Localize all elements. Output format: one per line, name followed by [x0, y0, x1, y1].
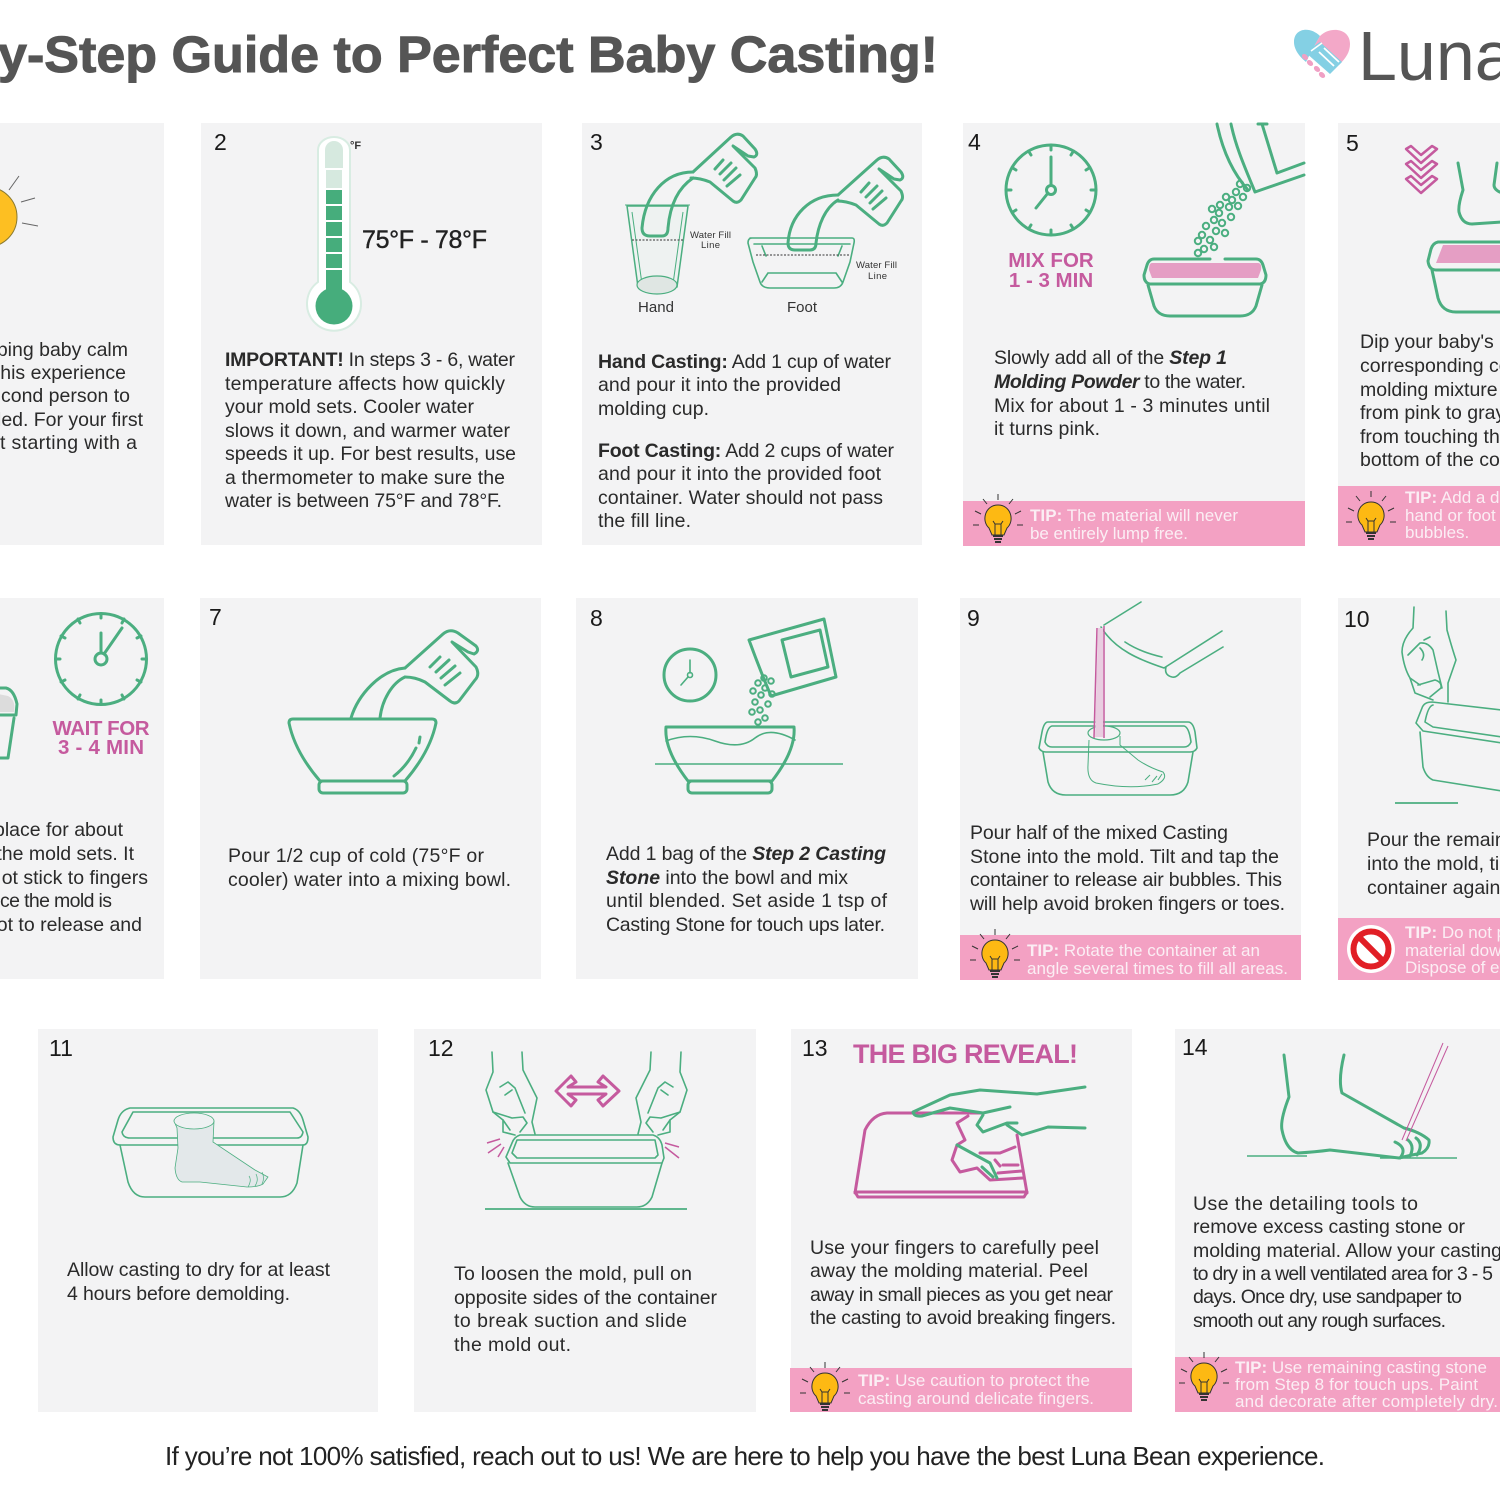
cup and container labels [638, 230, 897, 316]
icon: pulling container sides [485, 1052, 687, 1209]
step 14 text: days. Once dry, use sandpaper to [1193, 1286, 1462, 1308]
step 7 text: Pour 1/2 cup of cold (75°F or [228, 845, 484, 867]
step 8 text: until blended. Set aside 1 tsp of [606, 890, 888, 912]
step 1 text: his experience [0, 362, 126, 384]
step 3 text: Hand Casting: Add 1 cup of water [598, 351, 892, 373]
step 6 text [0, 819, 148, 936]
tip text: angle several times to fill all areas. [1027, 959, 1288, 978]
panel: step 2 [201, 123, 542, 545]
tip text: TIP: Use caution to protect the [858, 1371, 1090, 1390]
icon: pouring into mold [1039, 602, 1223, 795]
panel: step 3 [582, 123, 922, 545]
step 3 text: and pour it into the provided [598, 374, 841, 396]
title: y-Step Guide to Perfect Baby Casting! [0, 26, 938, 83]
step 2 text: IMPORTANT! In steps 3 - 6, water [225, 349, 516, 371]
tip text: TIP: Rotate the container at an [1027, 941, 1260, 960]
step 14 text: Use the detailing tools to [1193, 1193, 1418, 1215]
icon: lightbulb [973, 494, 1023, 542]
step 8 text: Stone into the bowl and mix [606, 867, 848, 889]
tip text [858, 1371, 1094, 1408]
step number 11: 11 [49, 1035, 73, 1061]
step 12 text: to break suction and slide [454, 1310, 687, 1332]
callout: wait time: WAIT FOR [52, 717, 150, 740]
icon: lightbulb [1179, 1352, 1229, 1400]
icon: thermometer: °F [350, 140, 361, 152]
step 8 text [606, 843, 888, 936]
step 11 text [67, 1259, 331, 1305]
step 1 text: led. For your first [0, 409, 144, 431]
panel: step 4 [963, 123, 1305, 546]
heading: the big reveal: THE BIG REVEAL! [853, 1039, 1078, 1069]
tip bar [963, 494, 1305, 546]
icon: clock [664, 649, 716, 701]
panel: step 14 [1175, 1029, 1500, 1412]
icon: lightbulb [1346, 491, 1396, 539]
step 9 text [969, 822, 1285, 915]
tip text [1405, 923, 1500, 977]
step 5 text: molding mixture [1360, 379, 1498, 401]
step 11 text: Allow casting to dry for at least [67, 1259, 331, 1281]
step 13 text: Use your fingers to carefully peel [810, 1237, 1099, 1259]
step 14 text: remove excess casting stone or [1193, 1216, 1466, 1238]
step 2 text: temperature affects how quickly [225, 373, 505, 395]
step 1 text [0, 339, 144, 454]
icon: no symbol [1347, 925, 1395, 973]
step 9 text: will help avoid broken fingers or toes. [969, 893, 1285, 915]
cup and container labels: Line [701, 240, 720, 251]
cup and container labels: Water Fill [690, 230, 731, 241]
step 1 text: ping baby calm [0, 339, 128, 361]
step 13 text: away the molding material. Peel [810, 1260, 1088, 1282]
step 3 text [598, 351, 894, 532]
step 12 text: the mold out. [454, 1334, 571, 1356]
icon: foot over container [1428, 163, 1500, 312]
step 2 text: your mold sets. Cooler water [225, 396, 474, 418]
step 12 text: To loosen the mold, pull on [454, 1263, 692, 1285]
panel: step 12 [414, 1029, 756, 1412]
step 3 text: the fill line. [598, 510, 691, 532]
step number 5: 5 [1346, 130, 1359, 156]
step number 7: 7 [209, 604, 222, 630]
step number 3: 3 [590, 129, 603, 155]
tip text: casting around delicate fingers. [858, 1389, 1094, 1408]
tip text [1405, 488, 1500, 542]
icon: sun [0, 176, 38, 247]
step 4 text [994, 347, 1270, 440]
step 12 text: opposite sides of the container [454, 1287, 718, 1309]
step 14 text: smooth out any rough surfaces. [1193, 1310, 1446, 1332]
step 4 text: Slowly add all of the Step 1 [994, 347, 1227, 369]
step 2 text: a thermometer to make sure the [225, 467, 505, 489]
icon: clock 1-3 min [1006, 145, 1096, 235]
callout: mix time: 1 - 3 MIN [1009, 269, 1093, 292]
step 9 text: Stone into the mold. Tilt and tap the [970, 846, 1279, 868]
step 4 text: Mix for about 1 - 3 minutes until [994, 395, 1270, 417]
tip bar [790, 1362, 1132, 1412]
step 6 text: ce the mold is [0, 890, 112, 912]
panel: step 10 [1338, 598, 1500, 980]
tip bar [1338, 918, 1500, 980]
icon: bag over bowl [655, 619, 843, 793]
tip bar [1338, 486, 1500, 546]
step 3 text: molding cup. [598, 398, 709, 420]
step 14 text [1193, 1193, 1500, 1332]
step 2 text [224, 349, 516, 512]
step 5 text [1360, 331, 1500, 471]
panel: step 7 [200, 598, 541, 979]
panel: step 13 [790, 1029, 1132, 1412]
step 10 text [1367, 829, 1500, 899]
step number 10: 10 [1344, 606, 1370, 632]
icon: lightbulb [800, 1362, 850, 1410]
logo: Luna Bean [1294, 17, 1500, 95]
step 6 text: ot stick to fingers [2, 867, 148, 889]
step 8 text: Casting Stone for touch ups later. [606, 914, 885, 936]
panel: step 9 [960, 598, 1301, 980]
tip text: hand or foot [1405, 506, 1496, 525]
footer message: If you’re not 100% satisfied, reach out to us! We are here to help you have the best Luna Bean experience. [165, 1441, 1325, 1471]
step 1 text: cond person to [1, 385, 130, 407]
step 4 text: Molding Powder to the water. [994, 371, 1246, 393]
step number 12: 12 [428, 1035, 454, 1061]
icon: container edge [0, 688, 17, 758]
step 10 text: container again [1367, 877, 1500, 899]
panel: step 6 [0, 598, 164, 979]
callout: wait time: 3 - 4 MIN [58, 736, 144, 759]
tip text [1235, 1358, 1498, 1411]
tip text: TIP: The material will never [1030, 506, 1238, 525]
step 6 text: ot to release and [0, 914, 142, 936]
cup and container labels: Line [868, 271, 887, 282]
step 3 text: Foot Casting: Add 2 cups of water [598, 440, 894, 462]
icon: drying casting in container [113, 1108, 308, 1197]
step 4 text: it turns pink. [994, 418, 1100, 440]
step 1 text: t starting with a [0, 432, 137, 454]
icon: lightbulb [970, 929, 1020, 977]
step number 4: 4 [968, 129, 981, 155]
step number 14: 14 [1182, 1034, 1208, 1060]
step 3 text: container. Water should not pass [598, 487, 883, 509]
step number 9: 9 [967, 605, 980, 631]
step 12 text [454, 1263, 718, 1356]
callout: wait time [52, 717, 150, 759]
tip text: from Step 8 for touch ups. Paint [1235, 1375, 1478, 1394]
step 6 text: the mold sets. It [0, 843, 135, 865]
callout: mix time [1008, 249, 1094, 292]
panel: step 11 [38, 1029, 378, 1412]
icon: pouring into foot container [748, 157, 903, 288]
step 13 text: the casting to avoid breaking fingers. [810, 1307, 1116, 1329]
step number 13: 13 [802, 1035, 828, 1061]
step number 8: 8 [590, 605, 603, 631]
tip text: bubbles. [1405, 523, 1469, 542]
icon: peeling mold [855, 1087, 1085, 1197]
step 2 text: slows it down, and warmer water [225, 420, 510, 442]
cup and container labels: Foot [787, 299, 818, 316]
icon: thermometer [307, 137, 361, 331]
callout: mix time: MIX FOR [1008, 249, 1094, 272]
icon: chevrons down [1406, 146, 1437, 193]
icon: double arrow [556, 1076, 619, 1106]
step 3 text: and pour it into the provided foot [598, 463, 882, 485]
step 14 text: to dry in a well ventilated area for 3 - 5 [1193, 1263, 1493, 1285]
icon: clock 3-4 min [56, 614, 146, 704]
step 2 text: speeds it up. For best results, use [225, 443, 516, 465]
icon: detailing foot [1247, 1043, 1457, 1158]
tip bar [960, 929, 1301, 980]
step 9 text: Pour half of the mixed Casting [970, 822, 1228, 844]
cup and container labels: Hand [638, 299, 674, 316]
step 14 text: molding material. Allow your casting [1193, 1240, 1500, 1262]
step 11 text: 4 hours before demolding. [67, 1283, 290, 1305]
icon: water into mixing bowl [289, 631, 478, 793]
tip text: be entirely lump free. [1030, 524, 1188, 543]
tip text: TIP: Use remaining casting stone [1235, 1358, 1487, 1377]
step 7 text [228, 845, 511, 891]
step 9 text: container to release air bubbles. This [970, 869, 1282, 891]
icon: pouring into cup [625, 134, 757, 294]
step 8 text: Add 1 bag of the Step 2 Casting [606, 843, 886, 865]
cup and container labels: Water Fill [856, 260, 897, 271]
temperature range: 75°F - 78°F [362, 226, 487, 254]
icon: powder into container [1144, 124, 1304, 316]
tip text: and decorate after completely dry. [1235, 1392, 1498, 1411]
panel: step 8 [576, 598, 918, 979]
step number 2: 2 [214, 129, 227, 155]
tip bar [1175, 1352, 1500, 1412]
tip text [1027, 941, 1288, 978]
icon: heart handshake [1294, 30, 1350, 79]
icon: hand tilting container [1395, 607, 1500, 803]
panel: step 1 [0, 123, 164, 545]
step 7 text: cooler) water into a mixing bowl. [228, 869, 511, 891]
step 2 text: water is between 75°F and 78°F. [224, 490, 502, 512]
step 13 text [810, 1237, 1116, 1329]
panel: step 5 [1338, 123, 1500, 546]
step 13 text: away in small pieces as you get near [810, 1284, 1114, 1306]
tip text [1030, 506, 1238, 543]
